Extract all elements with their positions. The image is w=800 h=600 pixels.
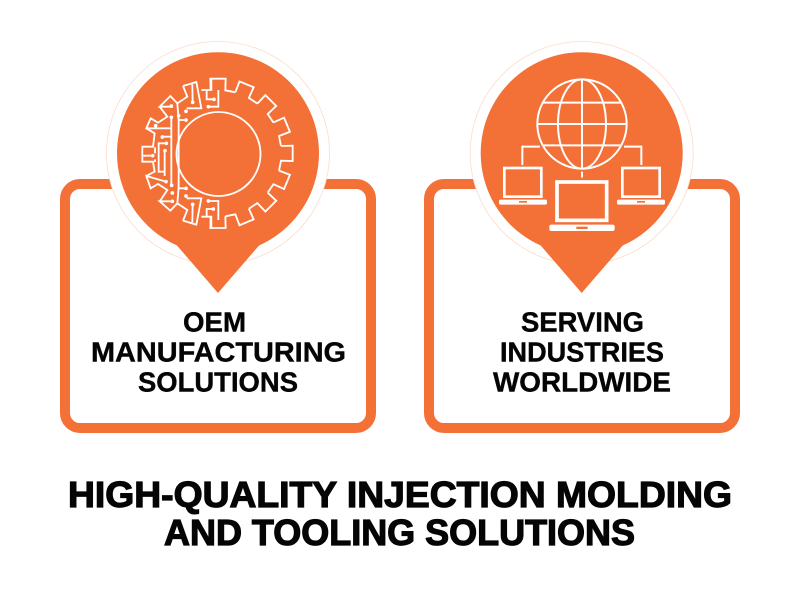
card text left: SOLUTIONS <box>138 366 298 398</box>
title <box>68 474 732 553</box>
card frame right <box>429 184 735 428</box>
card text left <box>91 306 346 398</box>
laptop center <box>549 182 615 231</box>
title: AND TOOLING SOLUTIONS <box>164 512 635 553</box>
card text right: SERVING <box>521 306 644 338</box>
icon: globe network with laptops <box>499 79 665 231</box>
laptop right <box>617 168 665 205</box>
panel: serving industries worldwide <box>429 42 735 428</box>
pin halo right <box>470 42 693 264</box>
pin marker right <box>481 52 683 293</box>
panel: OEM manufacturing solutions <box>65 42 371 428</box>
card text right: INDUSTRIES <box>500 336 664 368</box>
card text left: MANUFACTURING <box>91 336 346 368</box>
pin halo left <box>106 42 330 264</box>
title: HIGH-QUALITY INJECTION MOLDING <box>68 474 732 515</box>
card text left: OEM <box>183 306 246 338</box>
card text right: WORLDWIDE <box>493 366 671 398</box>
card frame left <box>65 184 371 428</box>
icon: circuit gear <box>142 79 294 229</box>
pin marker left <box>117 52 319 293</box>
laptop left <box>499 168 547 205</box>
globe <box>522 79 641 178</box>
card text right <box>493 306 671 398</box>
